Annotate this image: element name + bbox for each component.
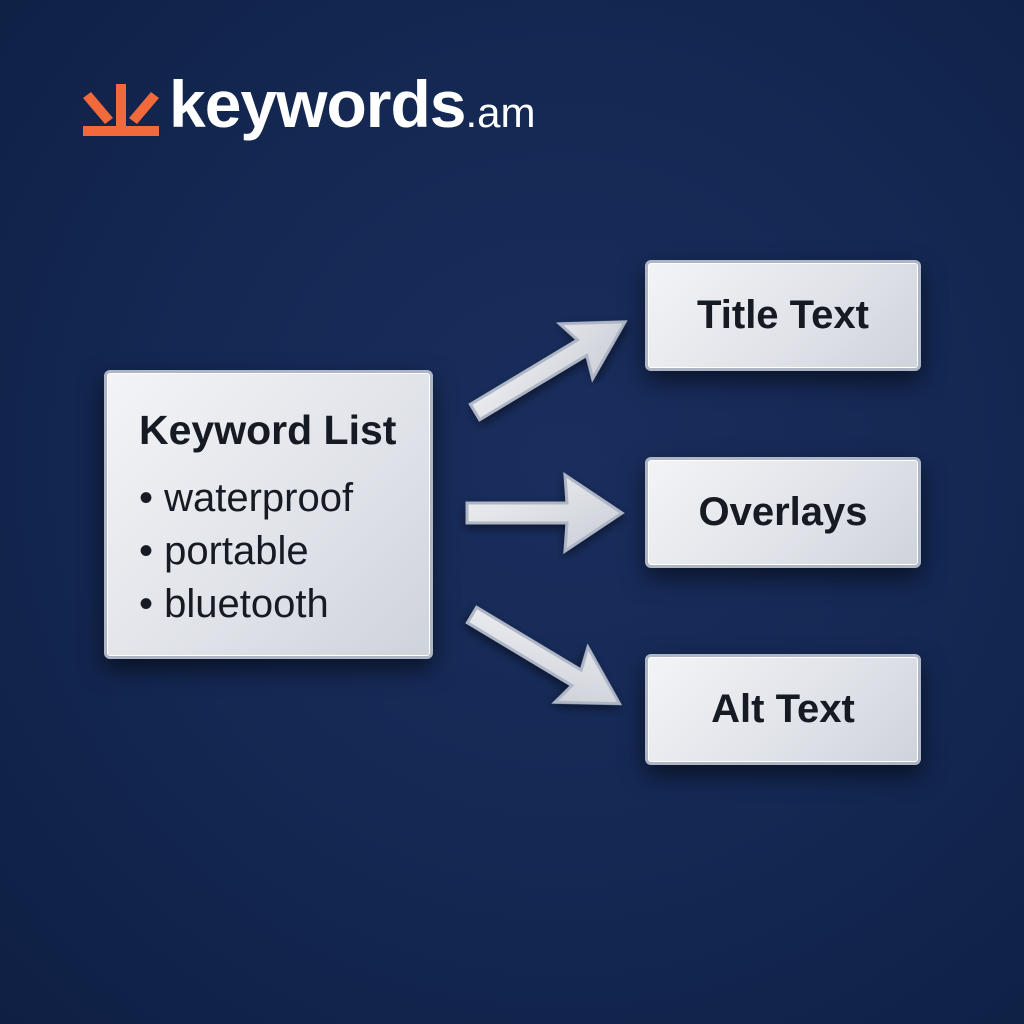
box: title text bbox=[645, 260, 921, 371]
box: overlays: Overlays bbox=[698, 490, 868, 534]
arrow: to overlays bbox=[467, 475, 622, 551]
logo bbox=[83, 67, 536, 141]
box: alt text: Alt Text bbox=[711, 687, 855, 731]
list: • bluetooth bbox=[139, 582, 329, 626]
box: alt text bbox=[645, 654, 921, 765]
box: title text: Title Text bbox=[697, 293, 869, 337]
list: • portable bbox=[139, 529, 309, 573]
brand text: keywords.am bbox=[169, 67, 536, 141]
arrow: to alt text bbox=[456, 588, 636, 731]
box: overlays bbox=[645, 457, 921, 568]
icon: logo mark bbox=[83, 84, 159, 136]
arrow: to title text bbox=[459, 294, 641, 439]
panel: keyword list bbox=[104, 370, 433, 659]
heading: Keyword List bbox=[139, 407, 396, 453]
list bbox=[139, 476, 354, 626]
list: • waterproof bbox=[139, 476, 353, 520]
